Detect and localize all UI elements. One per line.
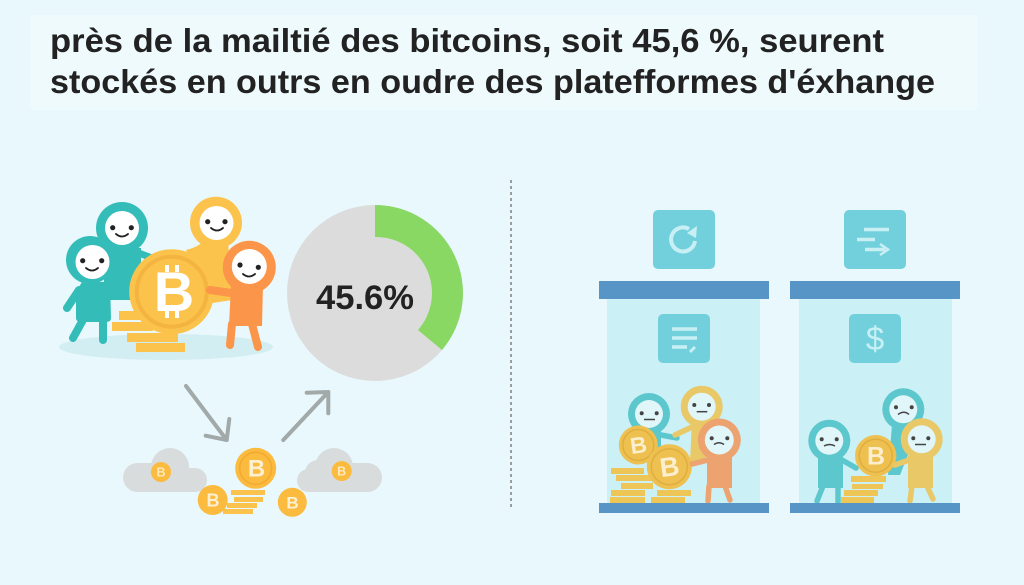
character: sad orange [692,418,741,501]
top bar [790,281,960,299]
arrow: up to donut [283,392,328,440]
coin stack [841,476,886,503]
cloud: right with coin: B [337,464,346,478]
right coin: B [286,494,299,512]
coin: B [658,451,681,483]
character: yellow [186,197,242,304]
panel: right vault [790,281,960,513]
character: front teal [66,236,130,340]
character: sad yellow [895,418,943,501]
value label: 45.6% [316,279,414,317]
coin: B [628,431,649,459]
title: stockés en outrs en oudre des platefformes d'éxhange [50,63,935,100]
panel: left vault [599,281,769,513]
coin stack [112,311,185,352]
coin stacks [610,468,691,503]
arrow: down to coins [186,386,229,440]
icon: refresh [653,210,715,269]
coin: B [867,442,885,470]
bottom bar [790,503,960,513]
large coin: B [248,456,265,482]
character: sad yellow [675,386,723,462]
coin [619,426,658,464]
illustration: happy people with bitcoin [59,197,276,360]
character: sad teal back [882,388,924,475]
glass [607,299,760,503]
icon: transfer lines [844,210,906,269]
icon: dollar: $ [866,320,884,357]
character: sad teal left [808,420,856,502]
title: près de la mailtié des bitcoins, soit 45,6 %, seurent [50,22,884,59]
cloud: left with coin [123,448,207,492]
top bar [599,281,769,299]
icon: document [658,314,710,363]
coin [647,444,692,489]
left coin: B [206,490,220,510]
ground shadow [59,334,273,360]
main bitcoin coin [129,249,214,334]
donut chart: 45.6% [287,205,463,381]
character: back teal [96,202,152,300]
small coin stack with coins [198,448,307,517]
title [30,15,978,110]
glass [799,299,952,503]
green segment [375,205,463,350]
character: sad teal [628,393,677,452]
cloud: right with coin [297,448,382,492]
main bitcoin coin: B [154,260,194,323]
stack [223,490,265,514]
dashed divider [510,180,512,510]
bottom bar [599,503,769,513]
cloud: left with coin: B [156,466,166,480]
coin [855,435,896,476]
character: orange [210,241,276,347]
icon: dollar [849,314,901,363]
